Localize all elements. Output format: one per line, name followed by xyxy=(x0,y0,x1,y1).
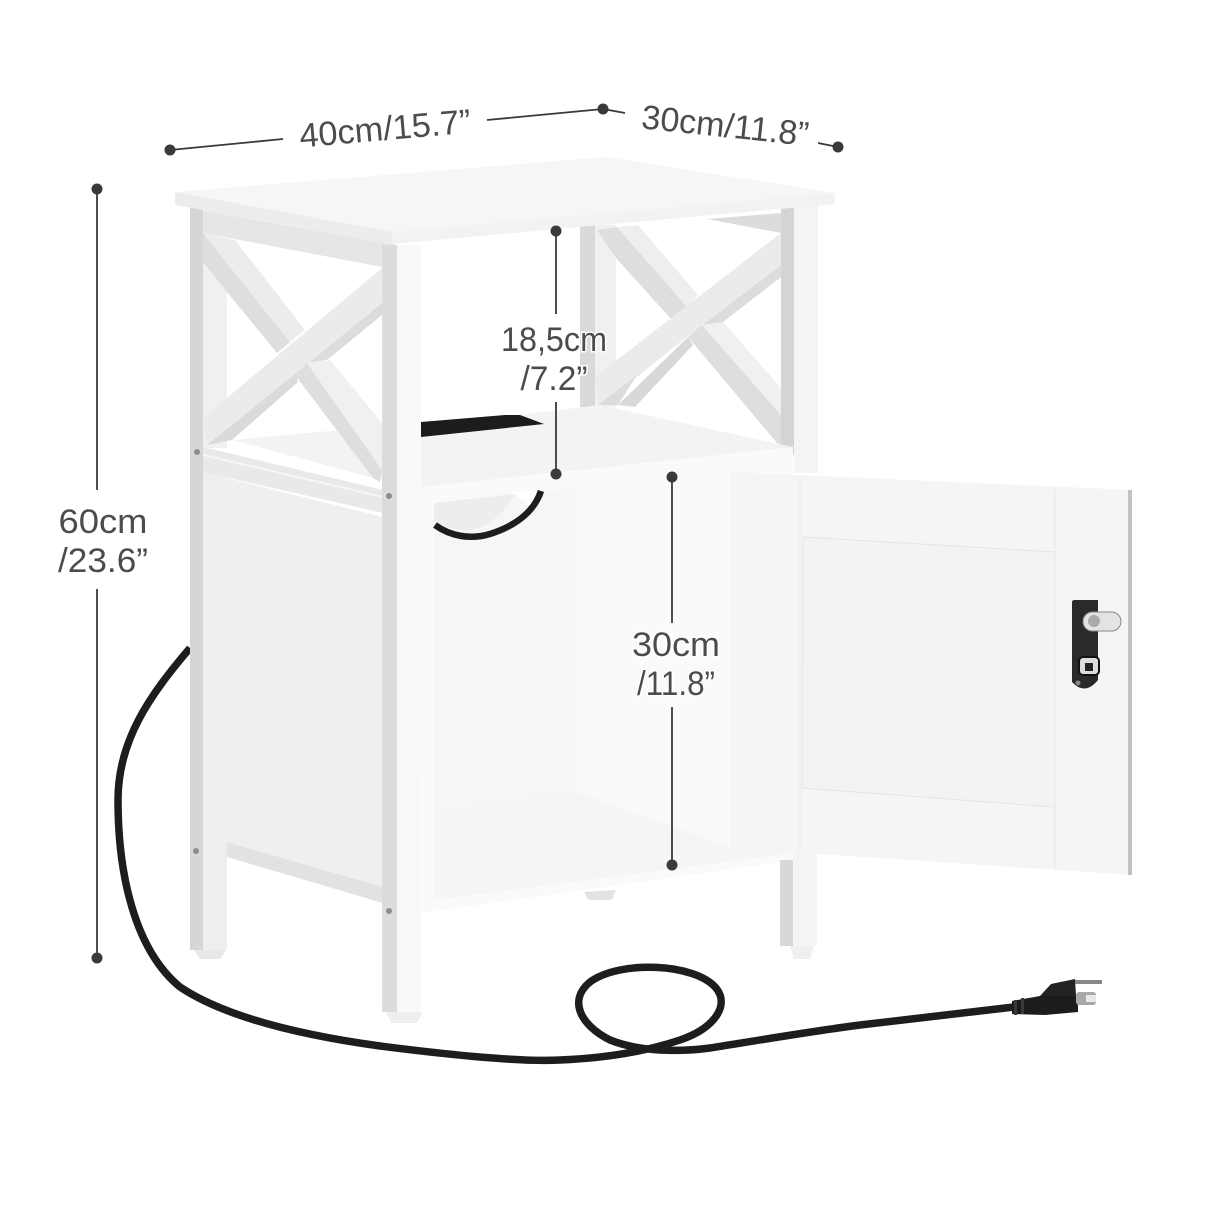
open door xyxy=(730,472,1132,875)
back posts upper xyxy=(580,212,793,407)
label: 60cm/23.6: /23.6” xyxy=(58,542,148,580)
right rear post xyxy=(781,205,818,473)
label: 18,5cm/7.2 xyxy=(501,321,607,398)
dimension: cabinet 30cm xyxy=(632,472,720,870)
table top xyxy=(175,157,835,244)
dimension: opening 18.5cm xyxy=(501,226,607,480)
label: 30cm/11.8: 30cm xyxy=(632,626,720,664)
label: 30cm/11.8 xyxy=(632,626,720,703)
plug xyxy=(1012,979,1102,1015)
power cord xyxy=(118,648,1102,1060)
label: 40cm/15.7: 40cm/15.7” xyxy=(298,103,472,155)
top rail left xyxy=(190,208,397,267)
label: 30cm/11.8: /11.8” xyxy=(637,665,715,703)
label: 30cm/11.8: 30cm/11.8” xyxy=(640,98,811,154)
lower rail left xyxy=(203,447,383,513)
middle shelf xyxy=(232,405,793,500)
right front leg xyxy=(780,850,817,959)
right X brace xyxy=(595,225,781,445)
cabinet interior xyxy=(421,460,795,913)
label: 60cm/23.6 xyxy=(58,503,148,580)
cabinet foot centre xyxy=(584,890,616,900)
label: 18,5cm/7.2: 18,5cm xyxy=(501,321,607,359)
label: 60cm/23.6: 60cm xyxy=(58,503,148,541)
power strip slot xyxy=(421,415,544,437)
front leg xyxy=(382,245,423,1023)
left inner faces xyxy=(203,238,227,448)
label: 18,5cm/7.2: /7.2” xyxy=(520,360,588,398)
left X brace xyxy=(203,233,382,482)
dimension: height 60cm xyxy=(58,184,148,964)
left side panel xyxy=(227,478,383,903)
cable corner behind shelf xyxy=(331,431,343,439)
cable through cabinet xyxy=(435,491,541,537)
left leg xyxy=(190,208,227,959)
nightstand furniture xyxy=(175,157,1132,1023)
door latch xyxy=(1072,600,1121,689)
dimension: width 40cm and depth 30cm xyxy=(164,98,844,156)
